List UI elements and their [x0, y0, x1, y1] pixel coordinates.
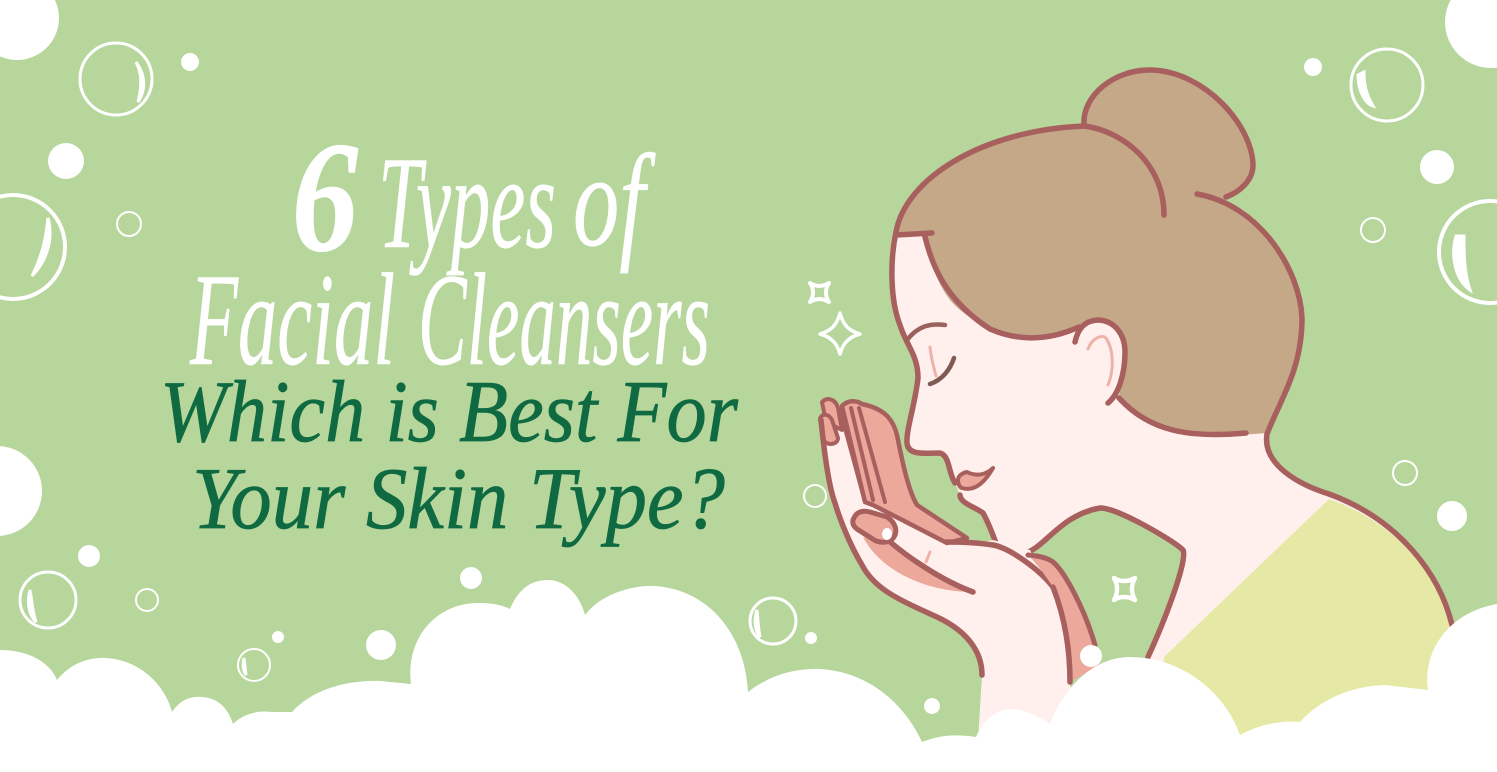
title: 6 Types of Facial Cleansers: Types	[378, 129, 556, 276]
hair bun fill	[1084, 70, 1253, 215]
finger lines	[840, 408, 885, 502]
subtitle: Which is Best For Your Skin Type?: Your Skin Type?	[192, 451, 725, 548]
front fingertip	[820, 415, 838, 444]
title: 6 Types of Facial Cleansers: of	[573, 127, 656, 274]
hair	[896, 126, 1302, 435]
soap foam clouds	[0, 580, 1497, 772]
subtitle: Which is Best For Your Skin Type?	[160, 364, 739, 548]
knuckle mark	[926, 552, 930, 562]
shirt	[1160, 499, 1452, 740]
skin: face and neck	[892, 220, 1452, 740]
sparkles	[810, 283, 1135, 600]
title: 6 Types of Facial Cleansers: 6	[292, 110, 358, 285]
cupped fingers	[842, 401, 967, 543]
thumb	[853, 511, 896, 542]
back fingertip	[822, 399, 842, 430]
title: 6 Types of Facial Cleansers: Facial	[189, 246, 395, 393]
hand and wrist skin	[821, 408, 1075, 740]
eyebrow and closed eye	[907, 324, 954, 384]
outlines: head, neck and shoulder	[892, 126, 1452, 657]
lips	[958, 468, 993, 489]
eyelid and ear details	[930, 336, 1112, 385]
foam bubble on cuff	[1080, 645, 1102, 667]
sleeve cuff	[1028, 555, 1100, 682]
hand outline	[821, 420, 1053, 675]
title: 6 Types of Facial Cleansers: Cleansers	[418, 246, 710, 393]
thumbnail highlight	[882, 528, 892, 540]
title: 6 Types of Facial Cleansers	[189, 110, 710, 393]
woman washing her face	[820, 70, 1452, 740]
hair bun outline	[1084, 70, 1253, 197]
subtitle: Which is Best For Your Skin Type?: Which is Best For	[160, 364, 739, 461]
palm shadow	[863, 537, 973, 592]
